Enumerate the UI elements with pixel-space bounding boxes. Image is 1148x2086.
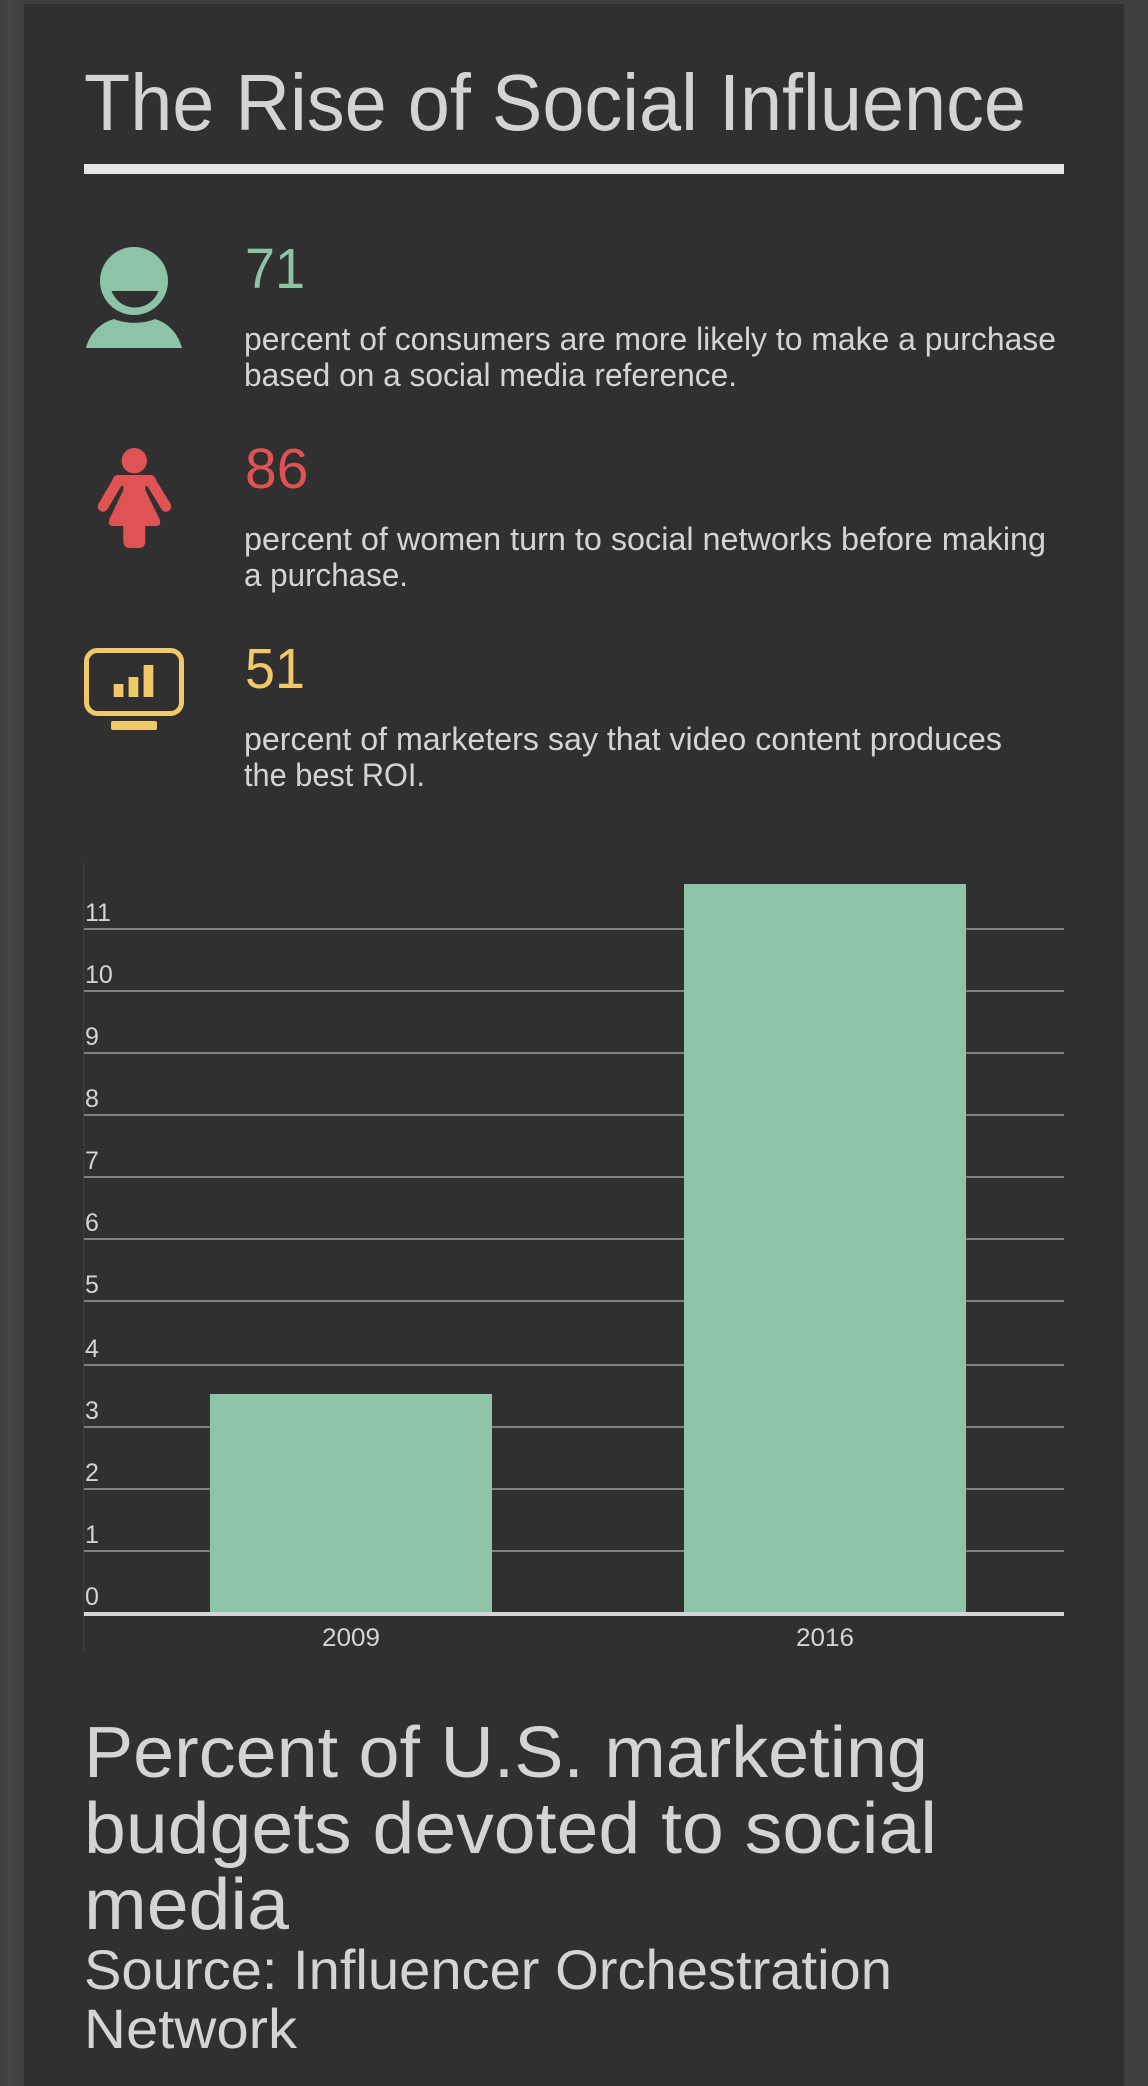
x axis labels (322, 1624, 854, 1652)
y axis labels: 0 (85, 1583, 99, 1611)
y axis labels: 11 (85, 899, 111, 927)
bar chart: marketing budgets 2009 vs 2016 (83, 862, 1064, 1652)
stat: 86 percent of women (103, 437, 1046, 593)
y axis labels: 8 (85, 1085, 99, 1113)
title rule (84, 164, 1064, 174)
chart caption: Percent of U.S. marketing (84, 1713, 928, 1793)
text: marketers description (244, 721, 1002, 793)
y axis labels: 1 (85, 1521, 99, 1549)
bar: 2016 (684, 884, 966, 1612)
title: The Rise of Social Influence (84, 58, 1026, 147)
x axis labels: 2009 (322, 1624, 380, 1652)
source note (84, 1938, 892, 2060)
text: consumers description: based on a social media reference. (244, 357, 737, 393)
stat: 51 percent of marketers (86, 637, 1002, 793)
text: consumers description: percent of consumers are more likely to make a purchase (244, 321, 1056, 357)
number: 51: 51 (245, 637, 305, 701)
x axis labels: 2016 (796, 1624, 854, 1652)
bar: 2009 (210, 1394, 492, 1612)
y axis labels: 7 (85, 1147, 99, 1175)
y axis labels: 5 (85, 1271, 99, 1299)
chart caption: budgets devoted to social (84, 1789, 937, 1869)
text: women description: percent of women turn to social networks before making (244, 521, 1046, 557)
source note: Network (84, 1997, 298, 2060)
number: 71: 71 (245, 237, 305, 301)
icon: smiling person (86, 247, 182, 348)
text: consumers description (244, 321, 1056, 393)
y axis labels: 4 (85, 1335, 99, 1363)
text: marketers description: the best ROI. (244, 757, 425, 793)
text: women description (244, 521, 1046, 593)
y axis labels: 2 (85, 1459, 99, 1487)
number: 86: 86 (245, 437, 308, 501)
y axis labels (85, 899, 113, 1611)
chart caption (84, 1713, 937, 1945)
icon: monitor with bar chart (86, 650, 182, 730)
y axis labels: 3 (85, 1397, 99, 1425)
y axis labels: 10 (85, 961, 113, 989)
x axis line (84, 1612, 1064, 1616)
chart caption: media (84, 1865, 290, 1945)
icon: woman figure (103, 448, 166, 548)
y axis labels: 9 (85, 1023, 99, 1051)
y axis labels: 6 (85, 1209, 99, 1237)
text: women description: a purchase. (244, 557, 408, 593)
source note: Source: Influencer Orchestration (84, 1938, 892, 2001)
text: marketers description: percent of marketers say that video content produces (244, 721, 1002, 757)
stat: 71 percent of consumers (86, 237, 1056, 393)
